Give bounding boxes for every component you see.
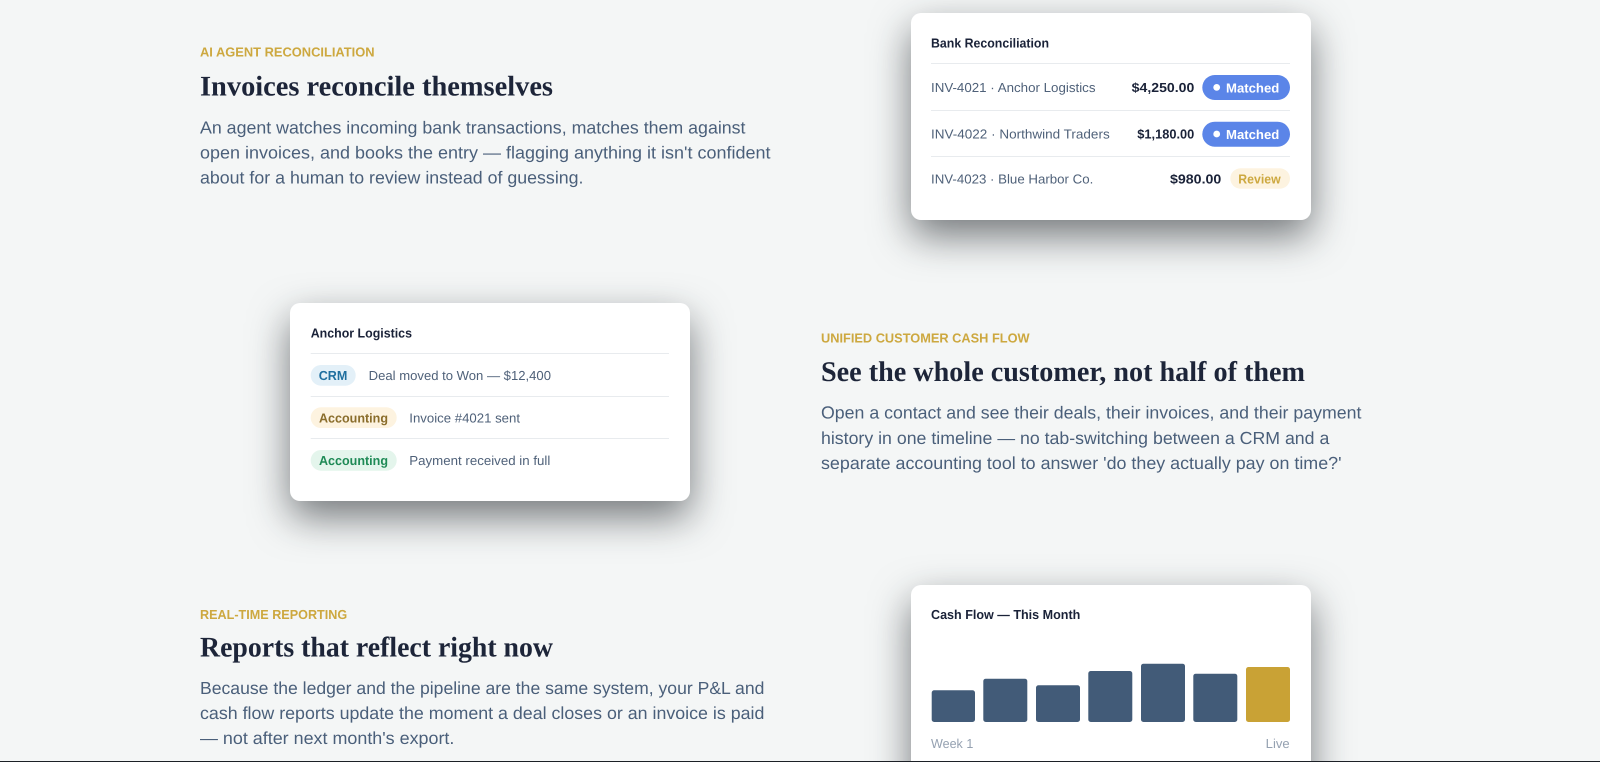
row: INV-4022: $1,180.00	[1137, 126, 1194, 141]
body text	[821, 403, 1362, 473]
timeline row: payment received: Accounting	[319, 453, 388, 468]
body text: open invoices, and books the entry — flagging anything it isn't confident	[200, 142, 771, 162]
timeline row: CRM	[311, 365, 551, 386]
row: INV-4021: $4,250.00	[1132, 80, 1194, 95]
timeline row: payment received: Payment received in full	[409, 453, 550, 468]
card title: Cash Flow — This Month	[931, 607, 1080, 622]
heading: Reports that reflect right now	[200, 633, 553, 664]
section text: unified customer cash flow	[821, 330, 1362, 473]
timeline row: invoice sent: Accounting	[319, 411, 388, 426]
row: INV-4021: Matched	[1226, 80, 1279, 95]
timeline row: CRM: Deal moved to Won — $12,400	[369, 368, 551, 383]
body text: about for a human to review instead of guessing.	[200, 167, 584, 187]
panel: bank reconciliation card	[911, 13, 1311, 220]
axis label: week 1: Week 1	[931, 736, 973, 751]
panel: customer timeline card	[290, 303, 690, 501]
card title: Anchor Logistics	[311, 326, 412, 341]
body text: history in one timeline — no tab-switching between a CRM and a	[821, 428, 1330, 448]
row: INV-4022: INV-4022 · Northwind Traders	[931, 126, 1110, 141]
heading: See the whole customer, not half of them	[821, 357, 1305, 388]
timeline row: invoice sent: Invoice #4021 sent	[409, 411, 520, 426]
body text: Open a contact and see their deals, their invoices, and their payment	[821, 403, 1362, 423]
row: INV-4023: $980.00	[1170, 171, 1221, 186]
row: INV-4023: INV-4023 · Blue Harbor Co.	[931, 171, 1093, 186]
card title: Bank Reconciliation	[931, 36, 1049, 50]
timeline row: payment received	[311, 450, 550, 471]
timeline row: CRM: CRM	[319, 368, 347, 383]
row: INV-4021: INV-4021 · Anchor Logistics	[931, 80, 1096, 95]
row: INV-4021	[931, 75, 1290, 100]
axis label: live: Live	[1266, 736, 1290, 751]
eyebrow: REAL-TIME REPORTING	[200, 607, 347, 622]
body text: An agent watches incoming bank transactions, matches them against	[200, 117, 746, 137]
row: INV-4022: Matched	[1226, 127, 1279, 142]
body text: separate accounting tool to answer 'do they actually pay on time?'	[821, 453, 1342, 473]
row: INV-4023	[931, 168, 1290, 189]
eyebrow: AI AGENT RECONCILIATION	[200, 44, 374, 60]
timeline row: invoice sent	[311, 407, 520, 428]
body text	[200, 117, 771, 187]
body text: cash flow reports update the moment a deal closes or an invoice is paid	[200, 703, 764, 723]
section text: AI agent reconciliation	[200, 44, 771, 187]
body text: Because the ledger and the pipeline are the same system, your P&L and	[200, 678, 764, 698]
row: INV-4022	[931, 122, 1290, 147]
panel: cash flow card	[911, 585, 1311, 762]
row: INV-4023: Review	[1238, 171, 1282, 186]
body text	[200, 678, 764, 748]
bar chart	[932, 664, 1290, 722]
eyebrow: UNIFIED CUSTOMER CASH FLOW	[821, 330, 1030, 345]
heading: Invoices reconcile themselves	[200, 72, 553, 102]
body text: — not after next month's export.	[200, 728, 454, 748]
section text: real-time reporting	[200, 607, 764, 748]
